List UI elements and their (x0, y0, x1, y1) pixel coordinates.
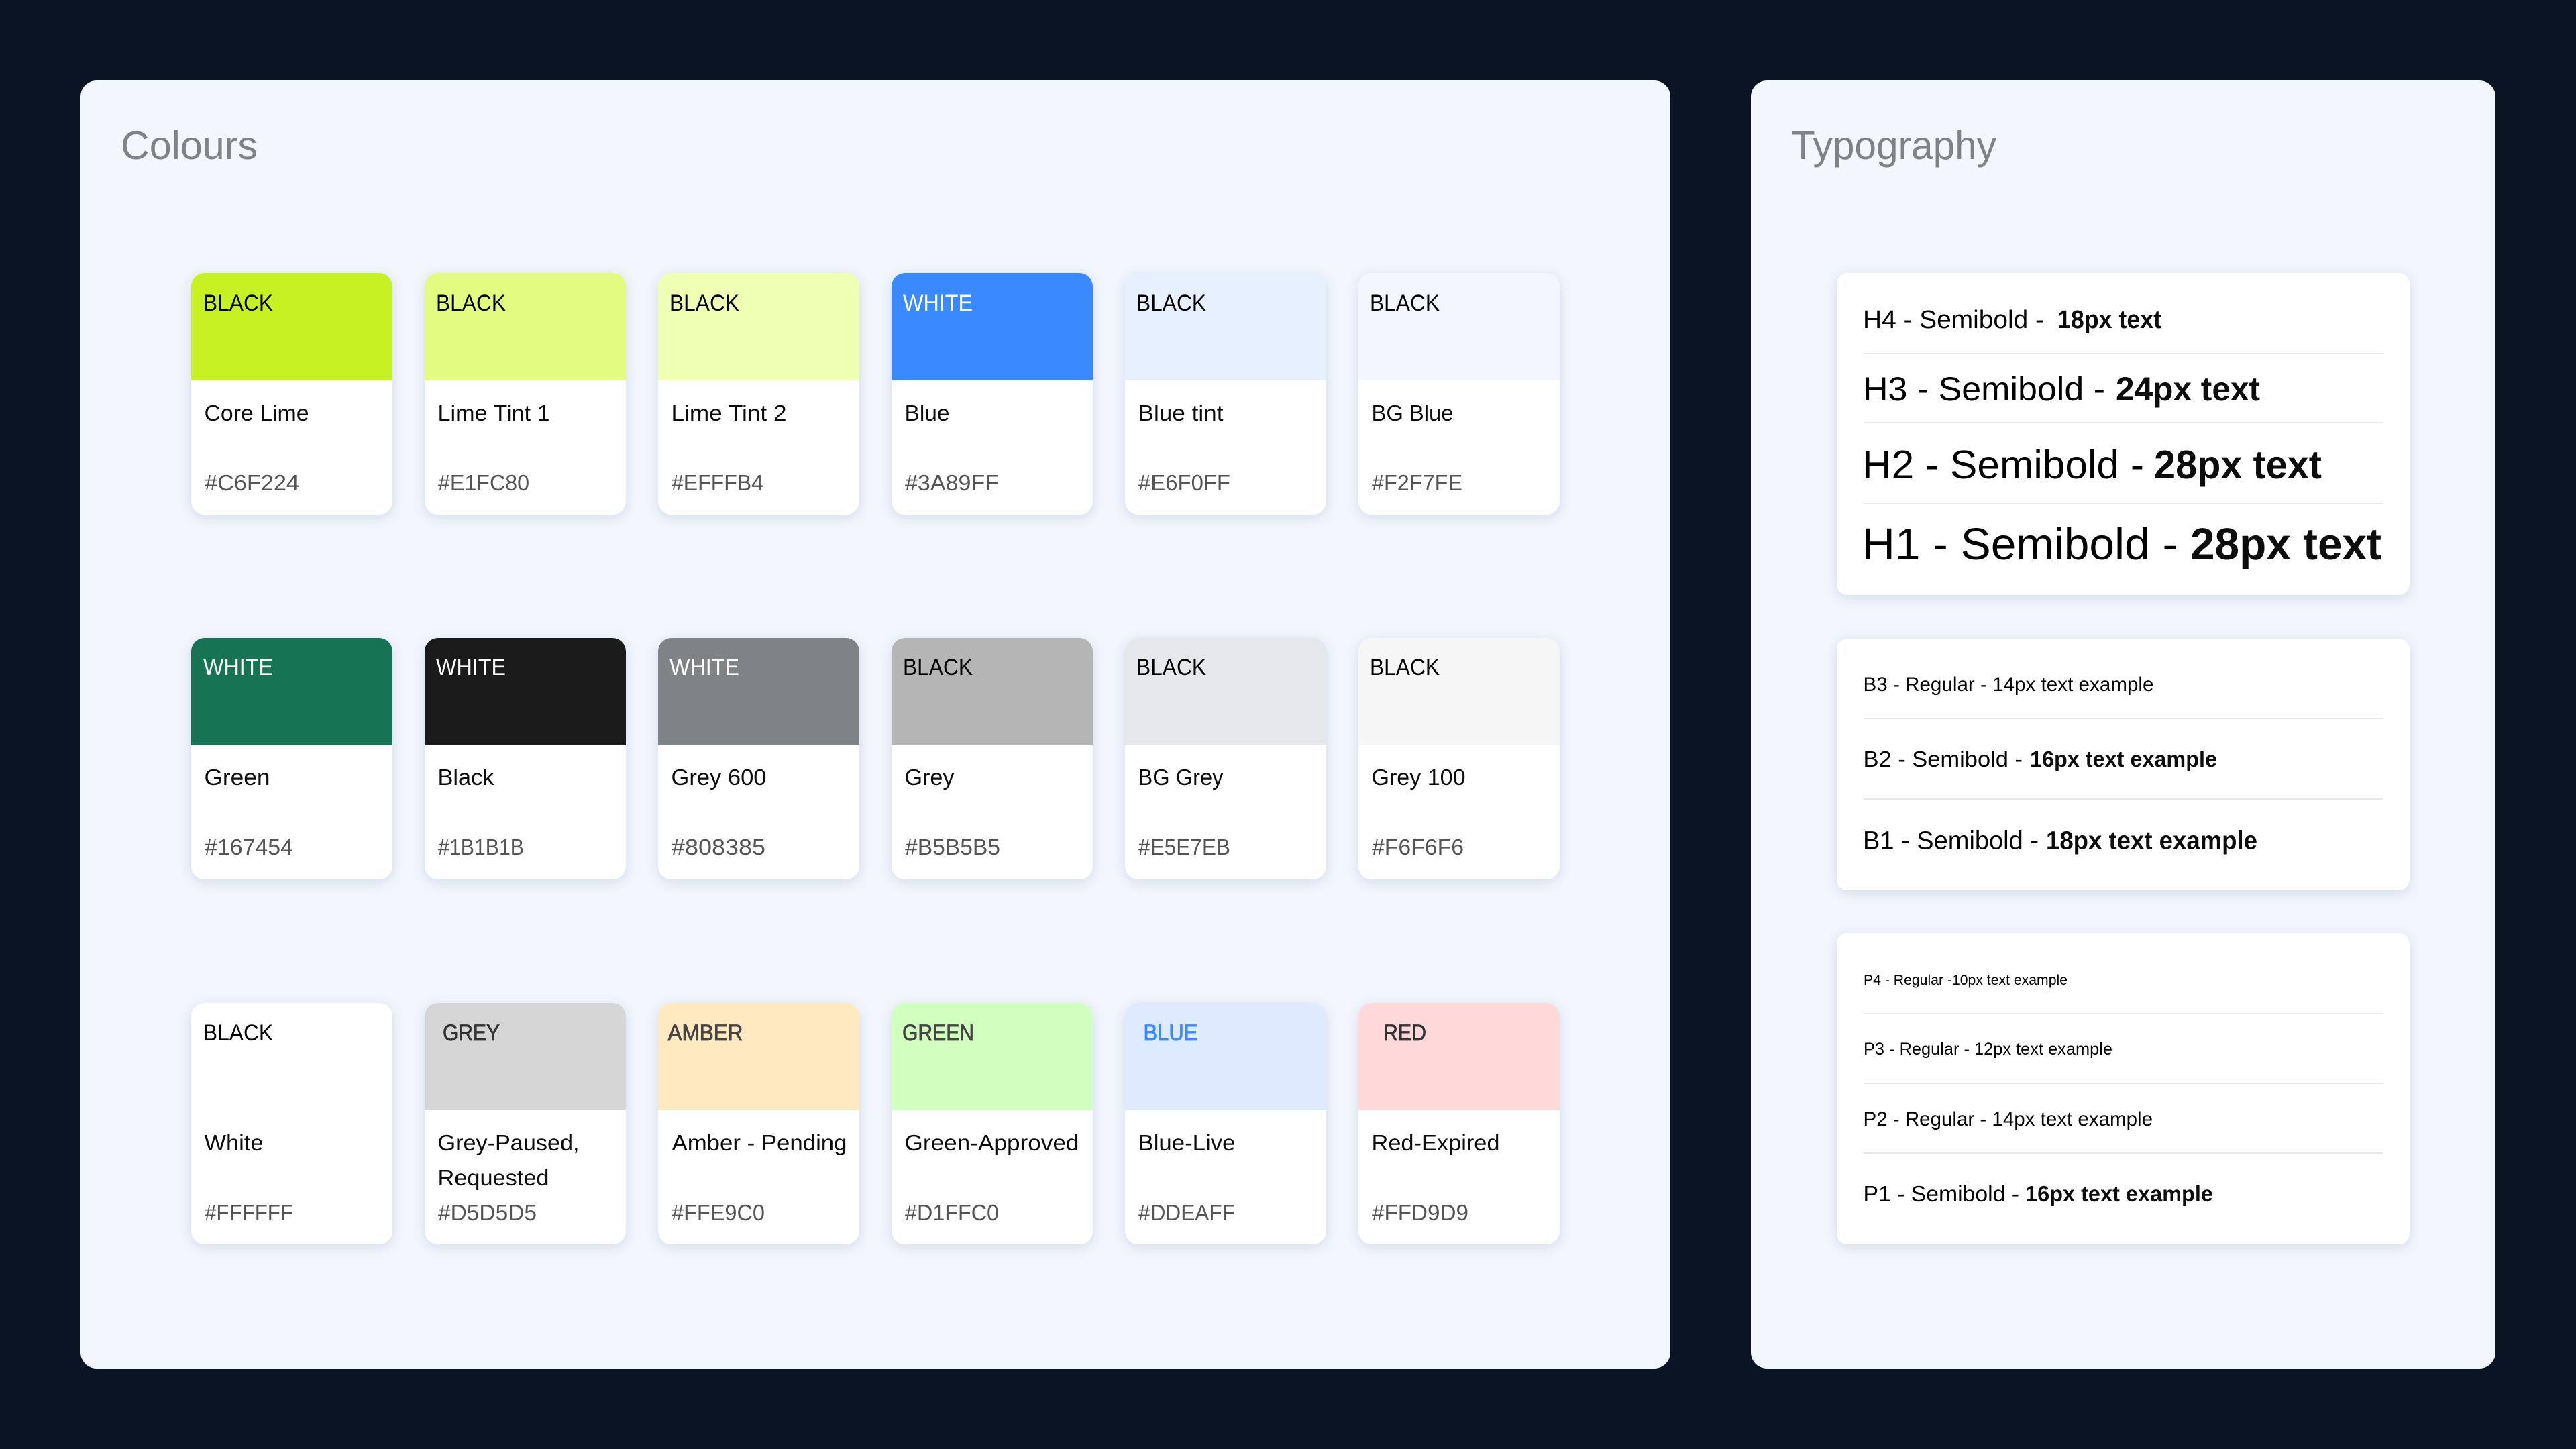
swatch: Lime Tint 2: Lime Tint 2 (671, 401, 786, 426)
swatch: BG Blue: #F2F7FE (1372, 471, 1462, 496)
swatch: Grey-Paused, Requested: Grey-Paused, (437, 1131, 580, 1156)
swatch: Lime Tint 1: #E1FC80 (438, 471, 529, 496)
swatch: Black (425, 638, 626, 879)
swatch: Blue-Live: #DDEAFF (1138, 1201, 1235, 1226)
text: H1 sample (1862, 519, 2381, 570)
swatch: Blue: #3A89FF (905, 471, 999, 496)
swatch: Grey 600: Grey 600 (671, 765, 767, 790)
swatch: Grey 100: #F6F6F6 (1372, 835, 1464, 860)
swatch: Blue: Blue (904, 401, 950, 426)
card: heading styles (1837, 273, 2410, 595)
text: P1 sample: 16px text example (2025, 1182, 2213, 1207)
swatch: Core Lime (191, 273, 392, 515)
swatch: Grey: #B5B5B5 (905, 835, 1000, 860)
swatch: Green-Approved: Green-Approved (904, 1131, 1079, 1156)
swatch: Grey 600 (658, 638, 859, 879)
swatch: Grey-Paused, Requested: Requested (437, 1166, 549, 1191)
swatch: Green: Green (204, 765, 270, 790)
swatch: Blue: WHITE (903, 290, 973, 316)
swatch: Amber - Pending (658, 1003, 859, 1244)
swatch: Core Lime: Core Lime (204, 401, 309, 426)
swatch: BG Blue: BG Blue (1371, 401, 1453, 426)
card: body styles (1837, 639, 2410, 890)
swatch: Grey (892, 638, 1093, 879)
heading: Typography: Typography (1791, 123, 1996, 168)
swatch: Grey-Paused, Requested: #D5D5D5 (438, 1201, 537, 1226)
swatch: Green: #167454 (205, 835, 293, 860)
text: B2 sample: B2 - Semibold - (1864, 747, 2023, 772)
swatch: Red-Expired: RED (1383, 1020, 1426, 1046)
swatch: Amber - Pending: Amber - Pending (672, 1131, 847, 1156)
swatch: Grey-Paused, Requested (425, 1003, 626, 1244)
text: B2 sample (1864, 747, 2217, 772)
swatch: Green-Approved: #D1FFC0 (905, 1201, 999, 1226)
swatch: Grey 600: WHITE (669, 655, 739, 680)
swatch: BG Grey: #E5E7EB (1138, 835, 1230, 860)
text: P3 sample: P3 - Regular - 12px text example (1864, 1040, 2112, 1059)
swatch: Amber - Pending: #FFE9C0 (672, 1201, 765, 1226)
swatch: White: White (204, 1131, 263, 1156)
swatch: Grey: BLACK (903, 655, 973, 680)
text: B3 sample: B3 - Regular - 14px text example (1864, 674, 2153, 696)
swatch: Lime Tint 2: #EFFFB4 (672, 471, 763, 496)
swatch: Blue-Live (1125, 1003, 1326, 1244)
swatch: Lime Tint 2 (658, 273, 859, 515)
text: B1 sample: 18px text example (2046, 826, 2257, 855)
swatch: Blue (892, 273, 1093, 515)
swatch: Lime Tint 1: Lime Tint 1 (437, 401, 550, 426)
swatch: Green (191, 638, 392, 879)
swatch: White: #FFFFFF (205, 1201, 293, 1226)
swatch: Grey 100 (1358, 638, 1560, 879)
swatch: Amber - Pending: AMBER (668, 1020, 743, 1046)
text: H4 sample: H4 - Semibold - (1863, 306, 2044, 334)
text: H3 sample: H3 - Semibold - (1863, 370, 2105, 408)
swatch: Lime Tint 1: BLACK (436, 290, 506, 316)
swatch: Blue tint: BLACK (1136, 290, 1206, 316)
panel: colours (80, 80, 1670, 1368)
text: H2 sample: 28px text (2154, 443, 2322, 487)
swatch: White (191, 1003, 392, 1244)
swatch: Green: WHITE (203, 655, 273, 680)
swatch: Blue-Live: Blue-Live (1138, 1131, 1236, 1156)
text: P1 sample (1864, 1182, 2213, 1207)
swatch: BG Grey: BLACK (1136, 655, 1206, 680)
heading: Colours: Colours (121, 123, 258, 168)
swatch: Red-Expired: Red-Expired (1371, 1131, 1500, 1156)
swatch: BG Blue: BLACK (1370, 290, 1440, 316)
text: H3 sample (1863, 370, 2260, 408)
swatch: Core Lime: #C6F224 (205, 471, 299, 496)
swatch: Black: WHITE (436, 655, 506, 680)
swatch: Grey 100: BLACK (1370, 655, 1440, 680)
swatch: Grey-Paused, Requested: GREY (443, 1020, 500, 1046)
swatch: Blue tint: #E6F0FF (1138, 471, 1230, 496)
swatch: Black: #1B1B1B (438, 835, 524, 860)
swatch: Blue tint (1125, 273, 1326, 515)
swatch: Green-Approved: GREEN (902, 1020, 974, 1046)
swatch: BG Grey (1125, 638, 1326, 879)
text: B2 sample: 16px text example (2030, 747, 2217, 772)
swatch: White: BLACK (203, 1020, 273, 1046)
text: H2 sample (1862, 443, 2322, 487)
swatch: BG Grey: BG Grey (1138, 765, 1224, 790)
text: H3 sample: 24px text (2116, 370, 2260, 408)
swatch: Grey 600: #808385 (672, 835, 765, 860)
swatch: Green-Approved (892, 1003, 1093, 1244)
swatch: BG Blue (1358, 273, 1560, 515)
text: B1 sample: B1 - Semibold - (1863, 826, 2039, 855)
swatch: Blue-Live: BLUE (1143, 1020, 1198, 1046)
swatch: Grey 100: Grey 100 (1371, 765, 1466, 790)
swatch: Grey: Grey (904, 765, 955, 790)
panel: typography (1751, 80, 2496, 1368)
swatch: Red-Expired: #FFD9D9 (1372, 1201, 1468, 1226)
text: H2 sample: H2 - Semibold - (1862, 443, 2144, 487)
swatch: Core Lime: BLACK (203, 290, 273, 316)
text: P4 sample: P4 - Regular -10px text example (1864, 973, 2068, 988)
text: P2 sample: P2 - Regular - 14px text example (1864, 1108, 2153, 1130)
swatch: Lime Tint 2: BLACK (669, 290, 739, 316)
text: B1 sample (1863, 826, 2257, 855)
text: H1 sample: 28px text (2190, 519, 2381, 570)
text: H1 sample: H1 - Semibold - (1862, 519, 2178, 570)
swatch: Blue tint: Blue tint (1138, 401, 1224, 426)
swatch: Black: Black (437, 765, 494, 790)
swatch: Lime Tint 1 (425, 273, 626, 515)
text: H4 sample: 18px text (2057, 306, 2161, 334)
text: H4 sample (1863, 306, 2161, 334)
swatch: Red-Expired (1358, 1003, 1560, 1244)
card: paragraph styles (1837, 933, 2410, 1244)
text: P1 sample: P1 - Semibold - (1864, 1182, 2019, 1207)
